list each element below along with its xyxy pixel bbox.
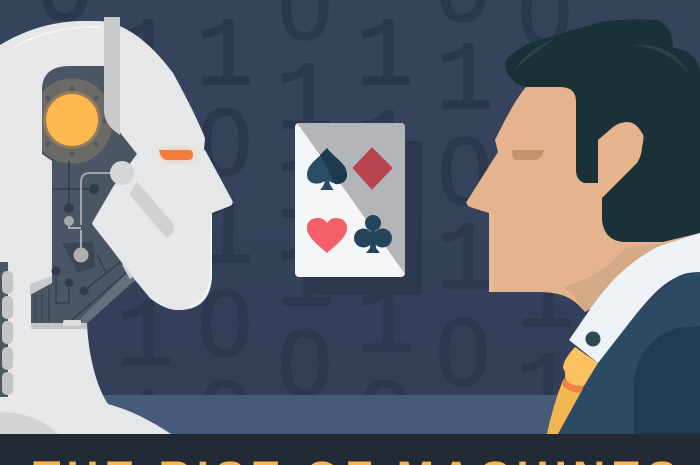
digit zeros: 0	[438, 118, 492, 225]
digit ones: 1	[116, 4, 174, 114]
digit ones: 1	[436, 28, 494, 138]
head cavity	[31, 66, 137, 323]
digit ones: 1	[356, 271, 414, 381]
neck and face	[466, 87, 700, 312]
digit zeros	[38, 0, 572, 465]
jaw joint	[110, 161, 134, 185]
robot body and skull	[0, 21, 233, 434]
diamond	[353, 148, 392, 189]
gear bolts	[46, 86, 108, 156]
face edge highlight	[489, 213, 494, 292]
binary digits backdrop	[38, 0, 574, 465]
digit ones: 1	[436, 208, 494, 318]
hair	[505, 19, 700, 242]
digit zeros: 0	[436, 299, 490, 406]
circuit traces	[52, 161, 120, 303]
glowing core	[46, 94, 98, 146]
tie lower	[547, 380, 582, 434]
club	[354, 215, 392, 253]
eye glow	[159, 150, 192, 160]
spine backing	[0, 262, 8, 397]
card shadow	[313, 141, 422, 295]
jaw slot	[131, 184, 172, 236]
table	[100, 395, 600, 434]
digit ones: 1	[516, 246, 574, 356]
digit ones: 1	[276, 225, 334, 335]
collar button	[586, 332, 600, 346]
skull highlight	[15, 27, 100, 47]
ear strip	[104, 17, 120, 135]
suit	[558, 272, 700, 434]
robot	[0, 17, 233, 434]
digit ones: 1	[276, 137, 334, 247]
jaw	[92, 150, 232, 310]
gear housing	[42, 78, 112, 164]
chip pad	[62, 242, 95, 273]
hair highlights	[515, 39, 688, 72]
card face	[295, 123, 405, 277]
title band	[0, 434, 700, 465]
digit zeros: 0	[198, 89, 252, 196]
light circuit wire	[81, 173, 112, 225]
eyebrow	[512, 150, 544, 160]
suit lapel shade	[634, 326, 700, 434]
spine pills	[2, 271, 13, 395]
digit ones: 1	[356, 95, 414, 205]
digit ones: 1	[196, 182, 254, 292]
digit zeros: 0	[198, 270, 252, 377]
tie band	[562, 378, 584, 393]
neck ribs	[35, 288, 49, 322]
eye	[159, 150, 193, 160]
shoulder shade	[0, 412, 58, 434]
collar	[569, 233, 700, 363]
card shaded half	[297, 123, 405, 274]
neck shadow	[563, 243, 663, 312]
digit ones: 1	[276, 48, 334, 158]
core glow	[43, 91, 101, 149]
man	[466, 19, 700, 434]
neck plates	[76, 273, 135, 323]
digit ones: 1	[116, 285, 174, 395]
heart	[307, 218, 347, 253]
digit zeros: 0	[278, 310, 332, 417]
digit ones	[116, 4, 574, 465]
digit ones: 1	[356, 4, 414, 114]
neck brackets	[30, 276, 52, 295]
jaw rim light	[190, 215, 211, 307]
digit ones: 1	[196, 4, 254, 114]
spade	[307, 148, 347, 190]
playing card	[295, 123, 422, 295]
tie knot	[563, 347, 598, 386]
